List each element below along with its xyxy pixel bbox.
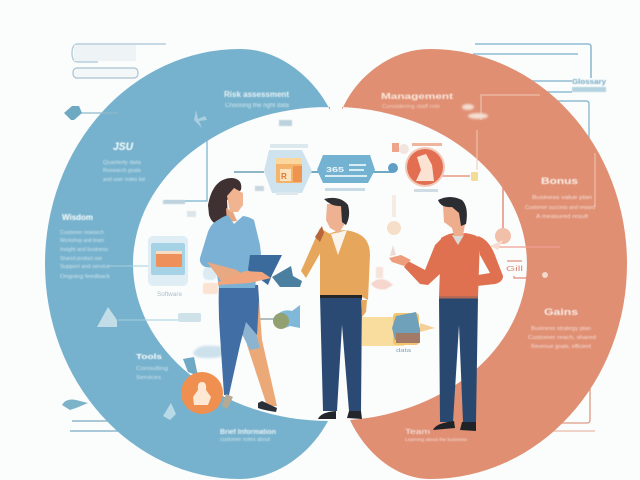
icon: small cloud on orange xyxy=(462,104,488,119)
connector lines in circle xyxy=(68,95,595,320)
heading: top orange: Considering staff role xyxy=(382,104,440,110)
icon: blue data pill: 365 xyxy=(326,167,344,174)
text block: orange bottom: Learning about the business xyxy=(405,437,468,442)
woman shirt xyxy=(200,215,261,288)
icon: round face xyxy=(490,228,511,250)
text block: blue bottom xyxy=(220,429,276,443)
text block: orange upper: A measured result xyxy=(536,214,589,220)
top-right label: Glossary xyxy=(572,77,607,86)
woman back leg xyxy=(245,282,277,406)
middle man hair xyxy=(324,198,349,225)
icon: lower-left pointer xyxy=(62,400,88,410)
text block: orange lower xyxy=(528,307,596,350)
icon: small tag in circle xyxy=(178,313,201,322)
text block: orange lower: Business strategy plan xyxy=(531,326,591,332)
text block: blue lower: Services xyxy=(136,375,161,381)
heading: top orange: Management xyxy=(381,92,453,101)
middle man sweater xyxy=(320,230,370,300)
text block: blue bottom: customer notes about xyxy=(220,437,271,443)
text block: orange upper: Bonus xyxy=(541,176,578,186)
text block: orange lower: Customer reach, shared xyxy=(528,335,596,341)
icon: document badge xyxy=(264,144,312,195)
right man hand xyxy=(389,255,411,266)
text block: orange lower: Revenue goals, efficient xyxy=(531,344,591,350)
text block: orange upper: Business value plan xyxy=(532,195,592,201)
text block: blue upper: and user notes list xyxy=(103,177,145,183)
heading: top blue: Risk assessment xyxy=(224,90,289,99)
icon: small blue tag xyxy=(163,403,176,420)
icon: small notes xyxy=(163,120,292,217)
icon: yellow arrow with device xyxy=(362,312,435,354)
middle man raised arm xyxy=(301,228,330,278)
middle man collar xyxy=(331,230,347,255)
woman neck and face xyxy=(226,208,237,222)
text block: blue upper: JSU xyxy=(113,141,134,153)
text block: blue upper: Research goals xyxy=(103,168,141,174)
panel: orange crescent xyxy=(342,49,627,479)
icon: blue monitor: Software xyxy=(157,292,183,298)
figure: middle man xyxy=(272,198,370,419)
icon: blue dot xyxy=(388,163,398,173)
figure: woman xyxy=(200,178,282,412)
middle man belt xyxy=(320,295,362,298)
middle man lower hand xyxy=(361,300,367,317)
middle man raised hand xyxy=(315,226,324,242)
woman hair back xyxy=(208,178,241,224)
text block: blue middle: Ongoing feedback xyxy=(60,274,110,280)
icon: peach bulb xyxy=(387,195,401,256)
text block: orange lower: Gains xyxy=(544,307,578,317)
middle man pants xyxy=(320,296,362,411)
text block: blue lower: Consulting xyxy=(136,366,168,372)
icon: pale blocks beside woman xyxy=(203,267,218,294)
middle man shoes xyxy=(318,411,336,419)
icon: pink cloud and blocks xyxy=(371,267,393,289)
woman hand xyxy=(218,271,271,285)
bottom-left lines xyxy=(70,421,128,431)
text block: blue middle: Customer research xyxy=(60,230,104,236)
blue glove handshake xyxy=(272,266,302,287)
icon: light blue cloud xyxy=(193,346,226,358)
text block: orange bottom xyxy=(405,429,468,442)
icon: orange circle with figure xyxy=(181,357,223,414)
right man hair xyxy=(438,197,467,226)
figure: right man xyxy=(389,197,503,431)
right man collar xyxy=(452,235,464,245)
top-left decorative labels xyxy=(72,44,166,78)
woman shoes xyxy=(222,394,233,409)
top-right connector lines xyxy=(473,44,591,142)
text block: blue middle: Insight and business xyxy=(60,247,108,253)
heading: top blue xyxy=(224,90,290,109)
top-right label xyxy=(572,77,607,92)
text block: blue middle xyxy=(60,213,110,280)
woman front leg and pants xyxy=(219,285,259,395)
right man left arm xyxy=(404,238,442,285)
heading: top blue: Choosing the right data xyxy=(225,103,290,109)
right man shoes xyxy=(433,421,455,430)
text block: orange upper xyxy=(525,176,595,220)
icon: small marker on blue xyxy=(194,110,207,128)
text block: orange upper: Customer success and reward xyxy=(525,205,595,211)
text block: blue bottom: Brief Information xyxy=(220,429,276,436)
icon: red mini label xyxy=(506,261,548,278)
icon: red mini label: Gill xyxy=(506,266,524,273)
icon: yellow arrow with device: data xyxy=(396,348,411,354)
right man right arm xyxy=(477,236,503,286)
icon: white triangle xyxy=(97,307,117,327)
icon: blue data pill xyxy=(317,155,375,191)
text block: blue upper xyxy=(103,141,145,183)
icon: blue-green fish shape xyxy=(258,305,300,329)
text block: orange bottom: Team xyxy=(405,429,430,436)
text block: blue upper: Quarterly data xyxy=(103,160,142,166)
bottom-right bracket xyxy=(548,385,595,431)
icon: document badge: R xyxy=(281,172,287,181)
tablet xyxy=(248,255,282,285)
icon: left pointer xyxy=(64,106,82,120)
icon: yellow tag xyxy=(471,172,478,181)
right man belt xyxy=(439,296,478,298)
text block: blue middle: Support and service xyxy=(60,264,110,270)
panel: blue crescent xyxy=(45,49,330,479)
right man pants xyxy=(439,297,478,422)
text block: blue middle: Wisdom xyxy=(62,213,93,222)
text block: blue lower xyxy=(136,352,168,381)
right man torso xyxy=(439,233,480,297)
woman arm xyxy=(207,262,246,282)
text block: blue lower: Tools xyxy=(136,352,162,361)
text block: blue middle: Shared product use xyxy=(60,256,102,262)
heading: top orange xyxy=(381,92,453,110)
middle man head xyxy=(326,204,346,233)
icon: blue monitor xyxy=(148,236,188,298)
text block: blue middle: Workshop and team xyxy=(60,238,104,244)
icon: orange circle badge xyxy=(392,143,445,192)
right man head xyxy=(443,206,465,236)
